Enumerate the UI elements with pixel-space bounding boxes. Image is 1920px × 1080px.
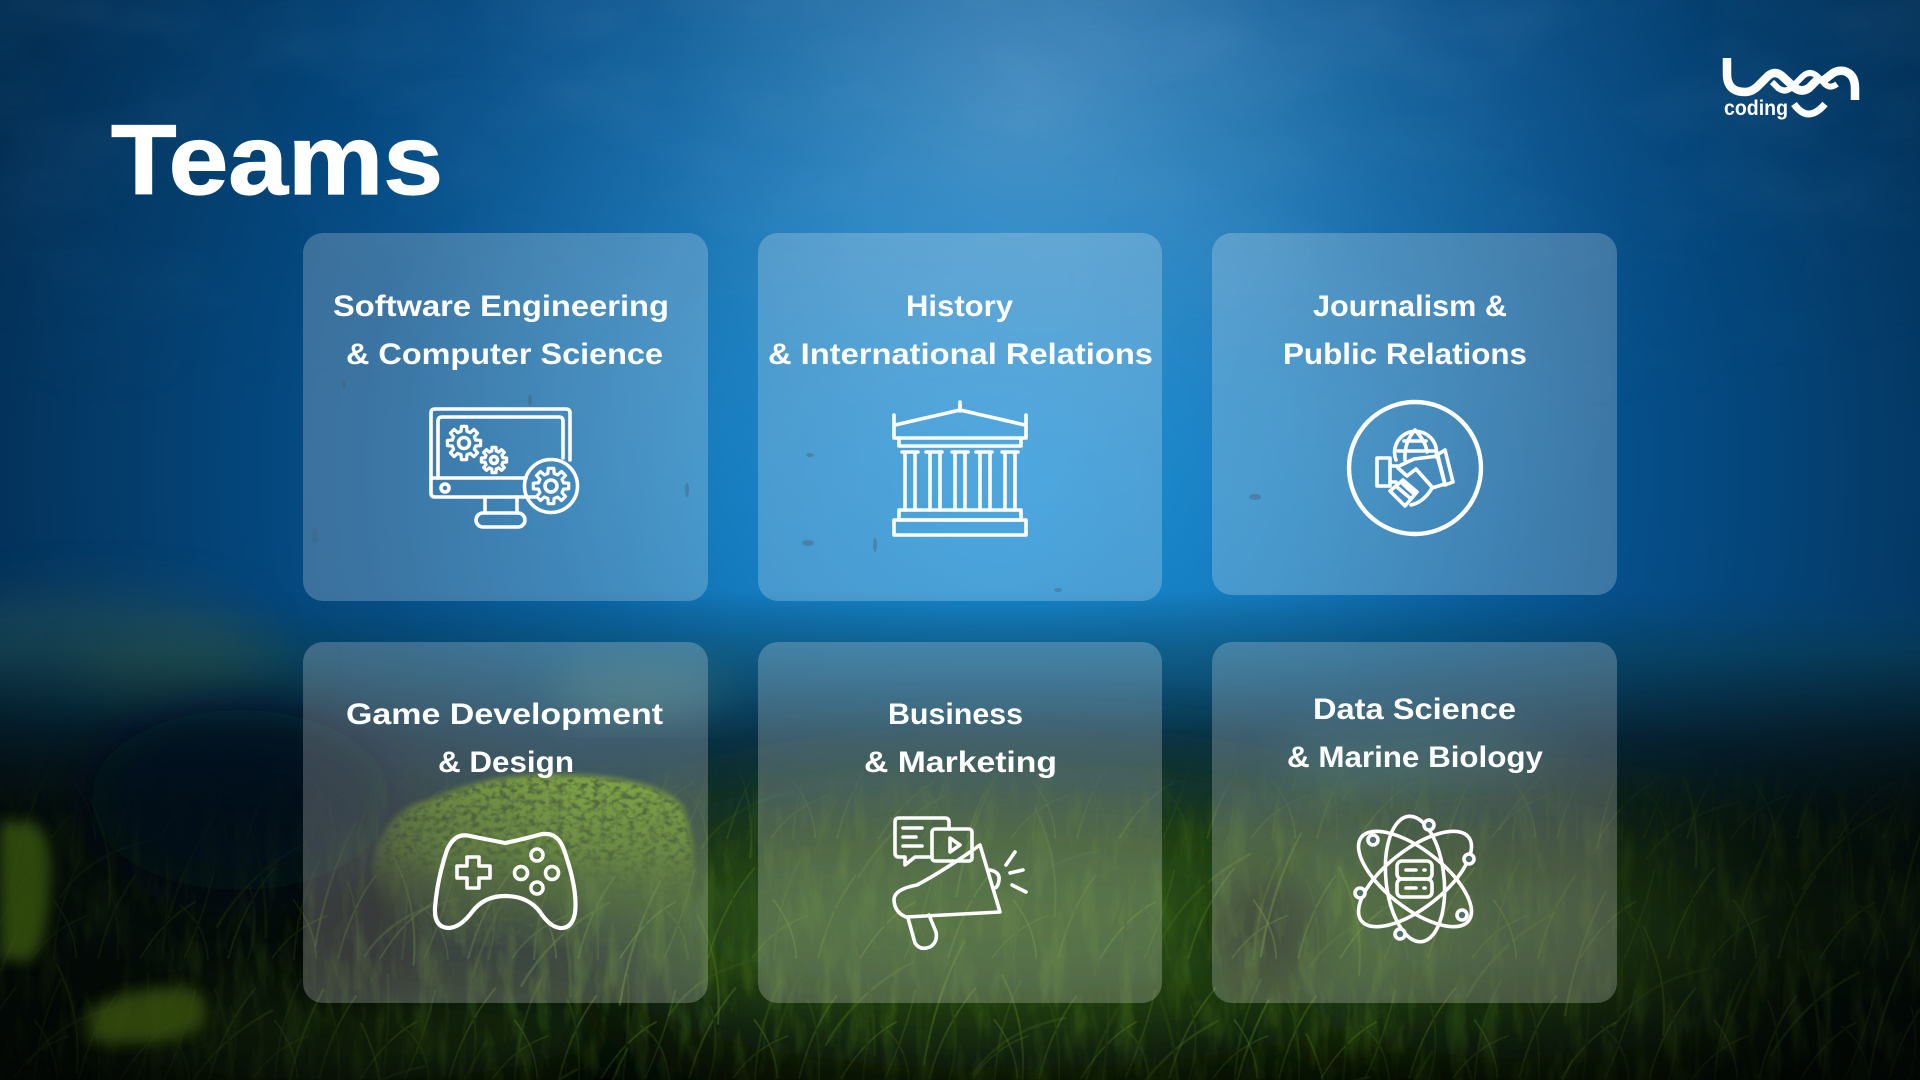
icon: megaphone and media: [894, 818, 1026, 948]
panel: History & International Relations: [758, 233, 1162, 601]
icon: atom with server: [1344, 813, 1486, 945]
heading: history: & International Relations: [768, 338, 1153, 371]
heading: journalism: Public Relations: [1283, 338, 1527, 371]
heading: software engineering: & Computer Science: [346, 338, 663, 371]
heading: data science: & Marine Biology: [1287, 741, 1543, 774]
heading: software engineering: [333, 290, 669, 371]
panel: Software Engineering & Computer Science: [303, 233, 708, 601]
logo: loon coding: coding: [1724, 97, 1788, 120]
logo: loon coding: [1724, 58, 1855, 120]
heading: business: & Marketing: [864, 746, 1057, 779]
icon: game controller: [435, 834, 576, 928]
icon: classical temple: [894, 402, 1026, 535]
title: Teams: [111, 104, 443, 215]
panel: Game Development & Design: [303, 642, 708, 1003]
panel: Data Science & Marine Biology: [1212, 642, 1617, 1003]
heading: game development: [346, 698, 663, 779]
heading: business: Business: [888, 698, 1023, 731]
icon: handshake and globe: [1349, 402, 1481, 534]
heading: data science: Data Science: [1313, 693, 1516, 726]
heading: game development: Game Development: [346, 698, 663, 731]
heading: journalism: [1283, 290, 1527, 371]
panel: Journalism & Public Relations: [1212, 233, 1617, 595]
heading: history: [768, 290, 1153, 371]
heading: history: History: [906, 290, 1013, 323]
heading: game development: & Design: [438, 746, 574, 779]
heading: software engineering: Software Engineering: [333, 290, 669, 323]
heading: data science: [1287, 693, 1543, 774]
heading: journalism: Journalism &: [1313, 290, 1507, 323]
heading: business: [864, 698, 1057, 779]
panel: Business & Marketing: [758, 642, 1162, 1003]
icon: monitor with gears: [431, 409, 578, 527]
